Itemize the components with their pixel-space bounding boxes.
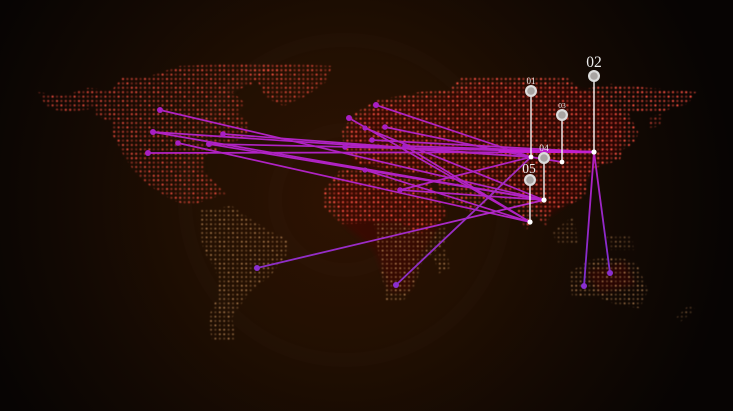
pin 02: 02 [586, 54, 602, 71]
pin 04 [538, 144, 550, 203]
continent: Southeast Asia islands [553, 215, 634, 250]
dotted world map [38, 64, 696, 340]
pin 05 [522, 161, 536, 225]
continent: Eurasia [342, 76, 696, 232]
bright hub band [500, 151, 594, 152]
pin 02 [586, 54, 602, 155]
pin 01 [525, 76, 537, 159]
concentric background rings [185, 40, 505, 360]
magenta routes [148, 105, 594, 222]
continent: New Zealand [676, 306, 692, 322]
pin 05: 05 [522, 161, 536, 176]
connection lines [148, 105, 610, 286]
continent: North America [38, 64, 285, 206]
soft red halo behind continents [330, 85, 635, 292]
pin 03 [556, 101, 568, 164]
pin 04: 04 [539, 144, 549, 154]
continent: Africa [322, 170, 450, 300]
route origin points [145, 102, 613, 289]
continent: Greenland [250, 64, 332, 106]
continent: Kamchatka [648, 114, 662, 128]
pin 01: 01 [526, 76, 536, 86]
pin 03: 03 [558, 101, 566, 110]
continent: Australia [570, 256, 648, 308]
violet routes [257, 152, 610, 286]
continent: South America [200, 206, 288, 340]
